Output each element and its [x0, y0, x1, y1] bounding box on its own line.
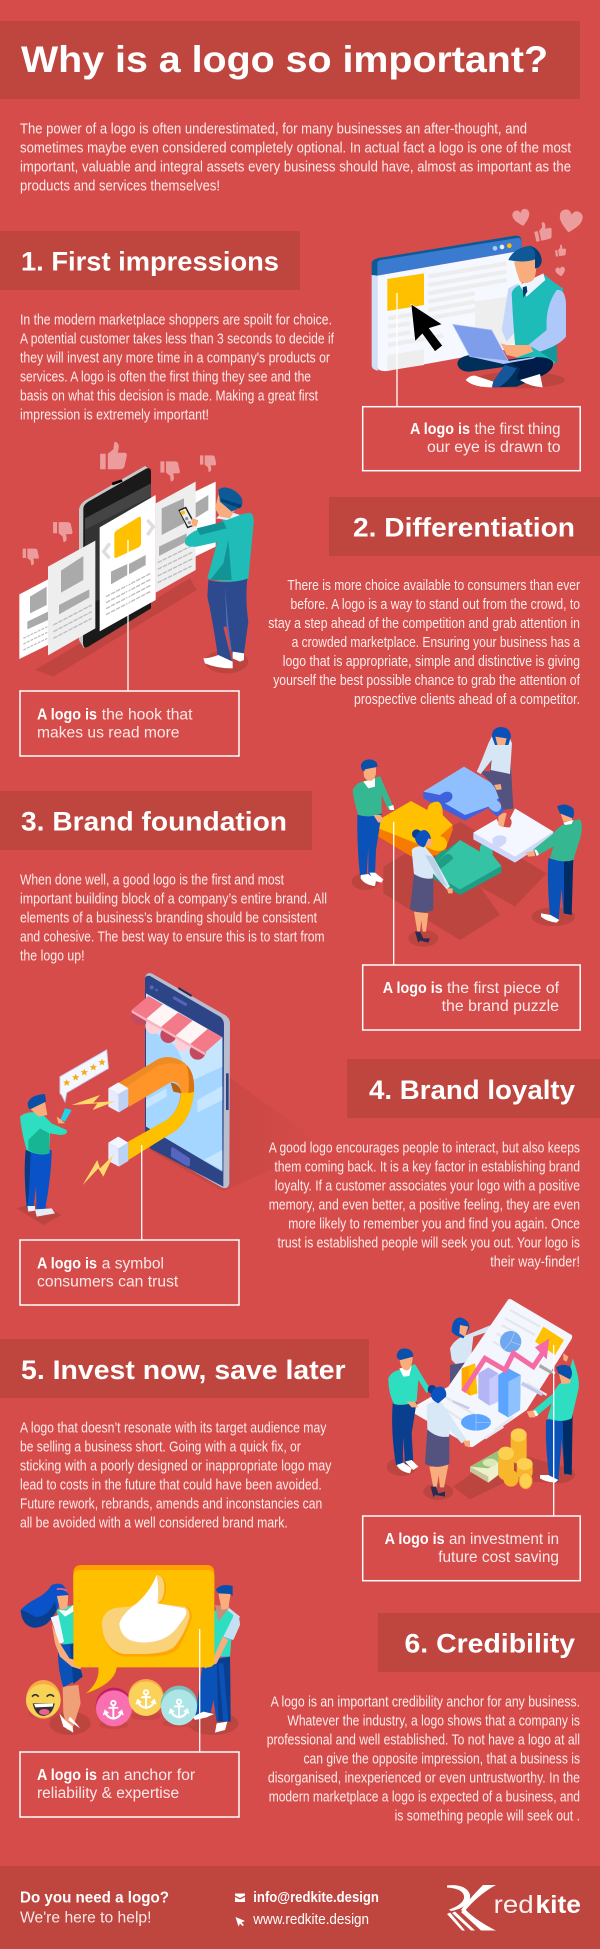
- illustration: phone, cards and man: [19, 466, 254, 677]
- heading: 3. Brand foundation: [0, 791, 312, 850]
- text: brand foundation: When done well, a good logo is the first and most: [20, 871, 285, 888]
- intro paragraph: The power of a logo is often underestimated, for many businesses an after-thought, and: [20, 120, 527, 137]
- callout: symbol: a symbol: [102, 1255, 164, 1272]
- text: brand loyalty: their way-finder!: [490, 1253, 580, 1270]
- callout: symbol: [20, 1145, 239, 1305]
- title: Why is a logo so important?: [21, 39, 548, 80]
- text: first impressions: services. A logo is often the first thing they see and the: [20, 368, 311, 385]
- icons: thumbs up and down: [23, 442, 216, 565]
- email address: info@redkite.design: [253, 1890, 379, 1906]
- callout: symbol: A logo is: [37, 1255, 97, 1272]
- heading: 1. First impressions: 1. First impressions: [21, 247, 279, 277]
- illustration: man with laptop and browser: [372, 236, 566, 388]
- heading: 3. Brand foundation: 3. Brand foundation: [21, 807, 287, 837]
- callout: anchor: [20, 1629, 239, 1817]
- callout: first thing: A logo is: [410, 421, 470, 438]
- text: invest now: lead to costs in the future that could have been avoided.: [20, 1476, 322, 1493]
- text: first impressions: they will invest any more time in a company's products or: [20, 349, 330, 366]
- callout: first thing: our eye is drawn to: [427, 439, 561, 456]
- redkite logo: [447, 1885, 581, 1930]
- callout: anchor: A logo is: [37, 1767, 97, 1784]
- heading: 1. First impressions: [0, 231, 300, 290]
- callout: anchor: reliability & expertise: [37, 1785, 179, 1802]
- callout: the hook: A logo is: [37, 706, 97, 723]
- text: credibility: [267, 1693, 580, 1824]
- callout: investment: A logo is: [385, 1531, 445, 1548]
- callout: first thing: [363, 293, 580, 471]
- text: first impressions: In the modern marketplace shoppers are spoilt for choice.: [20, 311, 332, 328]
- callout: first piece: [363, 822, 580, 1030]
- icon: envelope: [235, 1894, 245, 1902]
- callout: first piece: the brand puzzle: [442, 998, 559, 1015]
- heading: 5. Invest now, save later: 5. Invest now, save later: [21, 1355, 346, 1385]
- illustration: team with report, chart and coins: [387, 1299, 579, 1500]
- callout: first piece: A logo is: [383, 980, 443, 997]
- text: first impressions: A potential customer takes less than 3 seconds to decide if: [20, 330, 335, 347]
- intro paragraph: products and services themselves!: [20, 177, 220, 194]
- redkite logo: kite: [536, 1891, 581, 1919]
- intro paragraph: [20, 120, 572, 194]
- text: first impressions: impression is extremely important!: [20, 406, 209, 423]
- heading: 6. Credibility: [378, 1613, 600, 1672]
- text: invest now: sticking with a poorly designed or inappropriate logo may: [20, 1457, 332, 1474]
- title: [0, 21, 580, 99]
- illustration: thumbs-up speech bubble with people: [21, 1565, 240, 1735]
- callout: first thing: the first thing: [474, 421, 560, 438]
- illustration: magnet, phone shop and man: [17, 973, 325, 1225]
- text: invest now: A logo that doesn’t resonate with its target audience may: [20, 1419, 327, 1436]
- text: brand loyalty: [269, 1139, 580, 1270]
- text: differentiation: [268, 577, 581, 708]
- text: invest now: [20, 1419, 332, 1531]
- heading: 4. Brand loyalty: [347, 1059, 600, 1118]
- footer call to action: We're here to help!: [20, 1910, 152, 1927]
- heading: 6. Credibility: 6. Credibility: [404, 1629, 575, 1659]
- footer call to action: [20, 1890, 169, 1927]
- text: brand foundation: the logo up!: [20, 947, 85, 964]
- callout: investment: [363, 1345, 580, 1581]
- callout: the hook: makes us read more: [37, 724, 180, 741]
- footer: [0, 1866, 600, 1949]
- callout: investment: an investment in: [449, 1531, 559, 1548]
- text: invest now: Future rework, rebrands, amends and inconstancies can: [20, 1495, 322, 1512]
- text: brand foundation: important building block of a company’s entire brand. All: [20, 890, 327, 907]
- heading: 4. Brand loyalty: 4. Brand loyalty: [369, 1075, 575, 1105]
- text: brand foundation: [20, 871, 327, 964]
- icons: hearts and thumbs: [512, 208, 584, 277]
- callout: symbol: consumers can trust: [37, 1273, 179, 1290]
- text: invest now: be selling a business short. Going with a quick fix, or: [20, 1438, 301, 1455]
- website address: www.redkite.design: [252, 1912, 369, 1928]
- redkite logo: red: [494, 1891, 534, 1919]
- callout: investment: future cost saving: [438, 1549, 559, 1566]
- text: brand foundation: and cohesive. The best way to ensure this is to start from: [20, 928, 324, 945]
- text: brand foundation: elements of a business’s branding should be consistent: [20, 909, 318, 926]
- text: first impressions: basis on what this decision is made. Making a great first: [20, 387, 319, 404]
- text: invest now: all be avoided with a well considered brand mark.: [20, 1514, 288, 1531]
- footer call to action: Do you need a logo?: [20, 1890, 169, 1907]
- callout: first piece: the first piece of: [447, 980, 560, 997]
- heading: 2. Differentiation: [329, 497, 600, 556]
- heading: 2. Differentiation: 2. Differentiation: [353, 513, 575, 543]
- icon: cursor: [236, 1917, 245, 1926]
- heading: 5. Invest now, save later: [0, 1339, 369, 1398]
- text: first impressions: [20, 311, 335, 423]
- callout: anchor: an anchor for: [102, 1767, 195, 1784]
- illustration: team assembling puzzle: [352, 727, 582, 947]
- callout: the hook: [20, 540, 239, 756]
- callout: the hook: the hook that: [102, 706, 193, 723]
